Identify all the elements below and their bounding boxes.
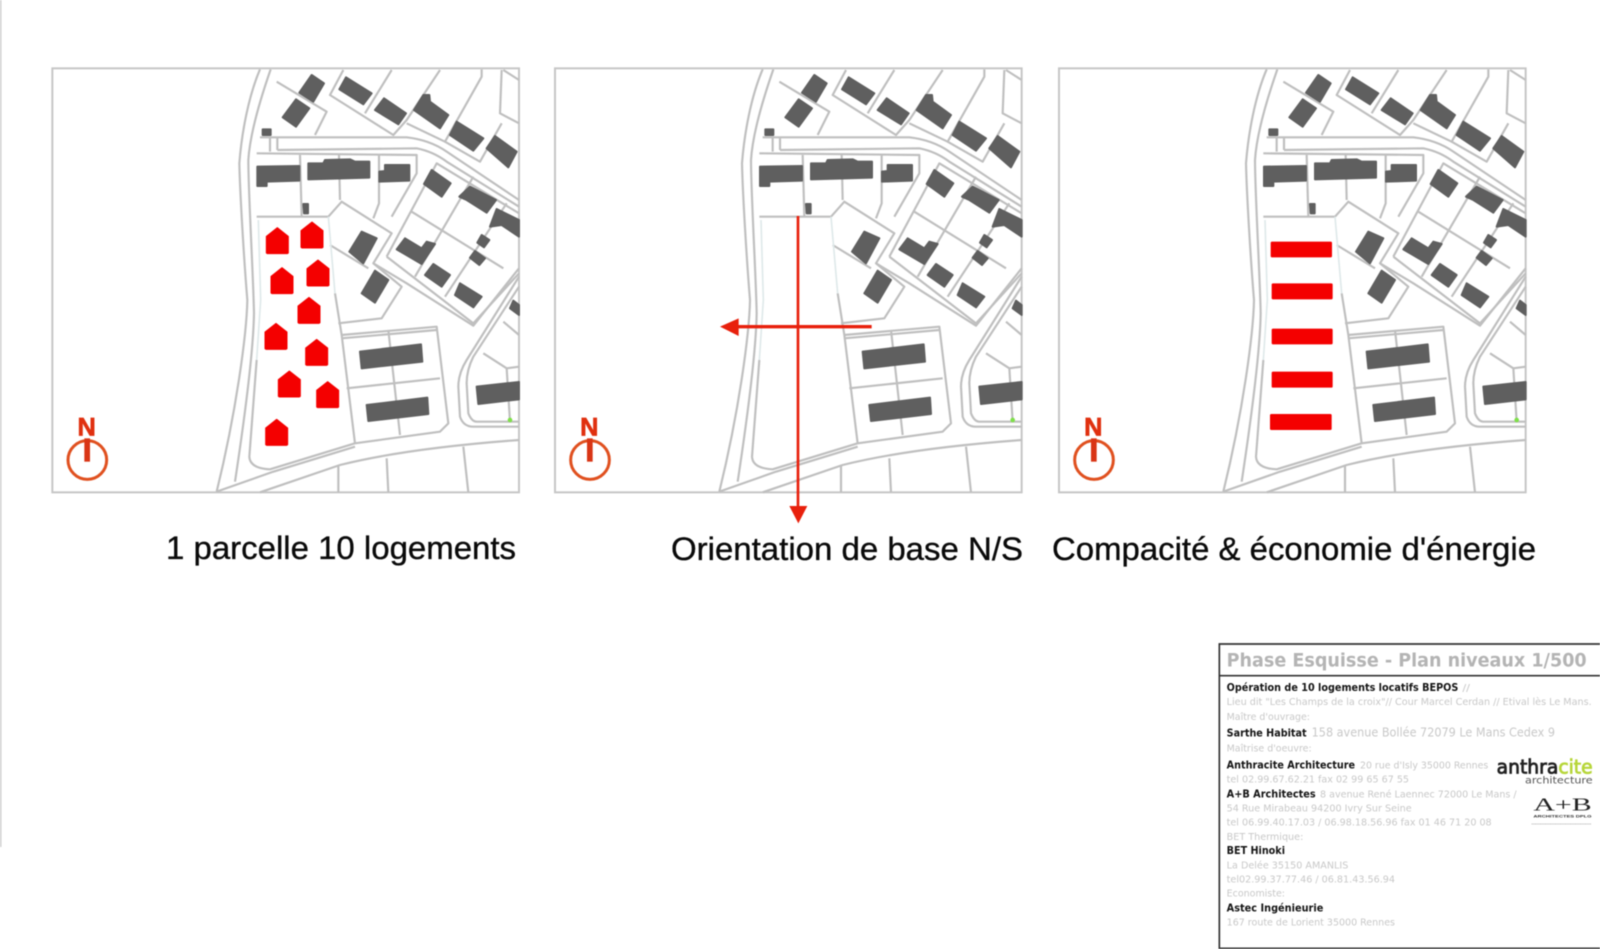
site plan 2	[555, 68, 1022, 492]
caption 3: Compacité & économie d'énergie	[1052, 531, 1536, 567]
project credits text: Lieu dit "Les Champs de la croix"// Cour Marcel Cerdan // Etival lès Le Mans.	[1227, 696, 1592, 708]
logo: anthracite architecture: architecture	[1525, 776, 1593, 787]
project credits text: Sarthe Habitat	[1227, 728, 1307, 740]
logo: A+B architectes: A+B	[1533, 795, 1592, 815]
project credits text: 54 Rue Mirabeau 94200 Ivry Sur Seine	[1227, 804, 1412, 815]
caption 2: Orientation de base N/S	[671, 531, 1023, 567]
project credits text: Anthracite Architecture	[1227, 759, 1355, 771]
caption 1: 1 parcelle 10 logements	[166, 530, 516, 566]
panel: title block	[1219, 644, 1600, 948]
project credits text: 158 avenue Bollée 72079 Le Mans Cedex 9	[1312, 726, 1555, 740]
site plan 3	[1059, 68, 1526, 492]
logo: anthracite architecture: anthracite	[1497, 755, 1593, 778]
site plan 1	[52, 68, 519, 492]
panel: orientation	[555, 68, 1023, 567]
red houses	[265, 222, 339, 445]
project credits text: tel 02.99.67.62.21 fax 02 99 65 67 55	[1227, 774, 1409, 785]
red building bars	[1270, 242, 1333, 430]
project credits text: Opération de 10 logements locatifs BEPOS	[1227, 682, 1458, 694]
project credits text: tel02.99.37.77.46 / 06.81.43.56.94	[1227, 874, 1395, 885]
logo: A+B architectes: ARCHITECTES DPLG	[1533, 815, 1592, 819]
project credits text: Economiste:	[1227, 889, 1285, 900]
panel: compacite	[1052, 68, 1536, 567]
project credits text: A+B Architectes	[1227, 789, 1316, 801]
project credits text	[1227, 682, 1592, 929]
project credits text: BET Hinoki	[1227, 845, 1285, 857]
project credits text: Astec Ingénieurie	[1227, 903, 1323, 915]
project credits text: Maîtrise d'oeuvre:	[1227, 743, 1312, 755]
project credits text: La Delée 35150 AMANLIS	[1227, 859, 1348, 871]
project credits text: tel 06.99.40.17.03 / 06.98.18.56.96 fax 01 46 71 20 08	[1227, 818, 1492, 829]
project credits text: BET Thermique:	[1227, 832, 1303, 843]
title block heading: Phase Esquisse - Plan niveaux 1/500	[1227, 651, 1587, 672]
project credits text: Maître d'ouvrage:	[1227, 711, 1310, 723]
page left edge line	[0, 0, 2, 847]
project credits text: 167 route de Lorient 35000 Rennes	[1227, 918, 1395, 929]
logo: A+B architectes	[1532, 795, 1592, 824]
project credits text: 8 avenue René Laennec 72000 Le Mans /	[1320, 789, 1517, 801]
title block frame	[1219, 644, 1600, 948]
arrows north-south and west	[720, 216, 872, 523]
project credits text: 20 rue d'Isly 35000 Rennes	[1360, 760, 1488, 771]
panel: 1 parcelle 10 logements	[52, 68, 519, 566]
project credits text: //	[1462, 683, 1471, 694]
